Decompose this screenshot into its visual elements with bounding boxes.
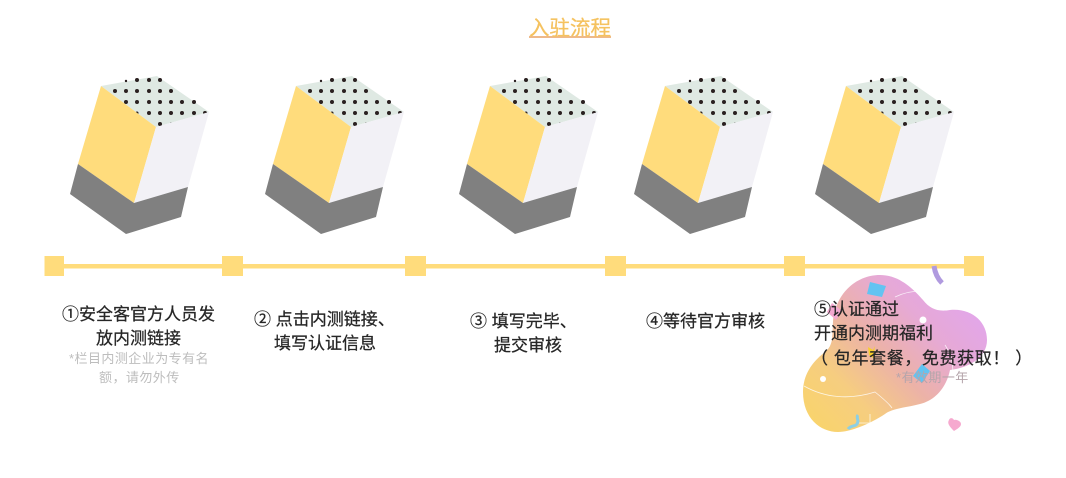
icon: yellow star	[868, 346, 875, 358]
icon: white dots	[820, 316, 926, 382]
icon: blue square lower	[913, 364, 930, 383]
icon: blue ribbon	[848, 415, 858, 429]
icon: pink diamond	[827, 303, 842, 320]
timeline	[44, 256, 984, 276]
step 1 text: 放内测链接	[96, 329, 181, 348]
step 3 text: 提交审核	[494, 336, 562, 355]
icon: white curves on blob	[804, 291, 953, 424]
cube 1	[70, 76, 209, 234]
step 5 text: （ 包年套餐，免费获取！ ）	[811, 349, 1033, 368]
step 2 text: 填写认证信息	[274, 334, 376, 353]
step 5 text: ⑤认证通过	[814, 300, 899, 319]
icon: blue square top	[867, 282, 886, 297]
cube 2	[265, 76, 404, 234]
icon: pink heart	[948, 418, 961, 431]
cube 3	[459, 76, 598, 234]
step 2 text	[254, 310, 395, 353]
step 1 text: ①安全客官方人员发	[62, 305, 215, 324]
step 1 text: 额，请勿外传	[99, 370, 180, 385]
step 5 note: *有效期一年	[896, 370, 969, 385]
step 2 text: ② 点击内测链接、	[254, 310, 395, 329]
step 4 text: ④等待官方审核	[646, 312, 765, 331]
step 3 text: ③ 填写完毕、	[470, 312, 577, 331]
step 5 text: 开通内测期福利	[814, 324, 933, 343]
cube 4	[634, 76, 773, 234]
step 3 text	[470, 312, 577, 355]
icon: purple arc	[934, 266, 942, 283]
step 1 text: *栏目内测企业为专有名	[69, 351, 209, 366]
cube 5	[815, 76, 954, 234]
title: 入驻流程	[529, 17, 611, 40]
step 5 text	[811, 300, 1033, 368]
step 1 text	[62, 305, 215, 385]
decorative gradient blob	[803, 275, 987, 432]
